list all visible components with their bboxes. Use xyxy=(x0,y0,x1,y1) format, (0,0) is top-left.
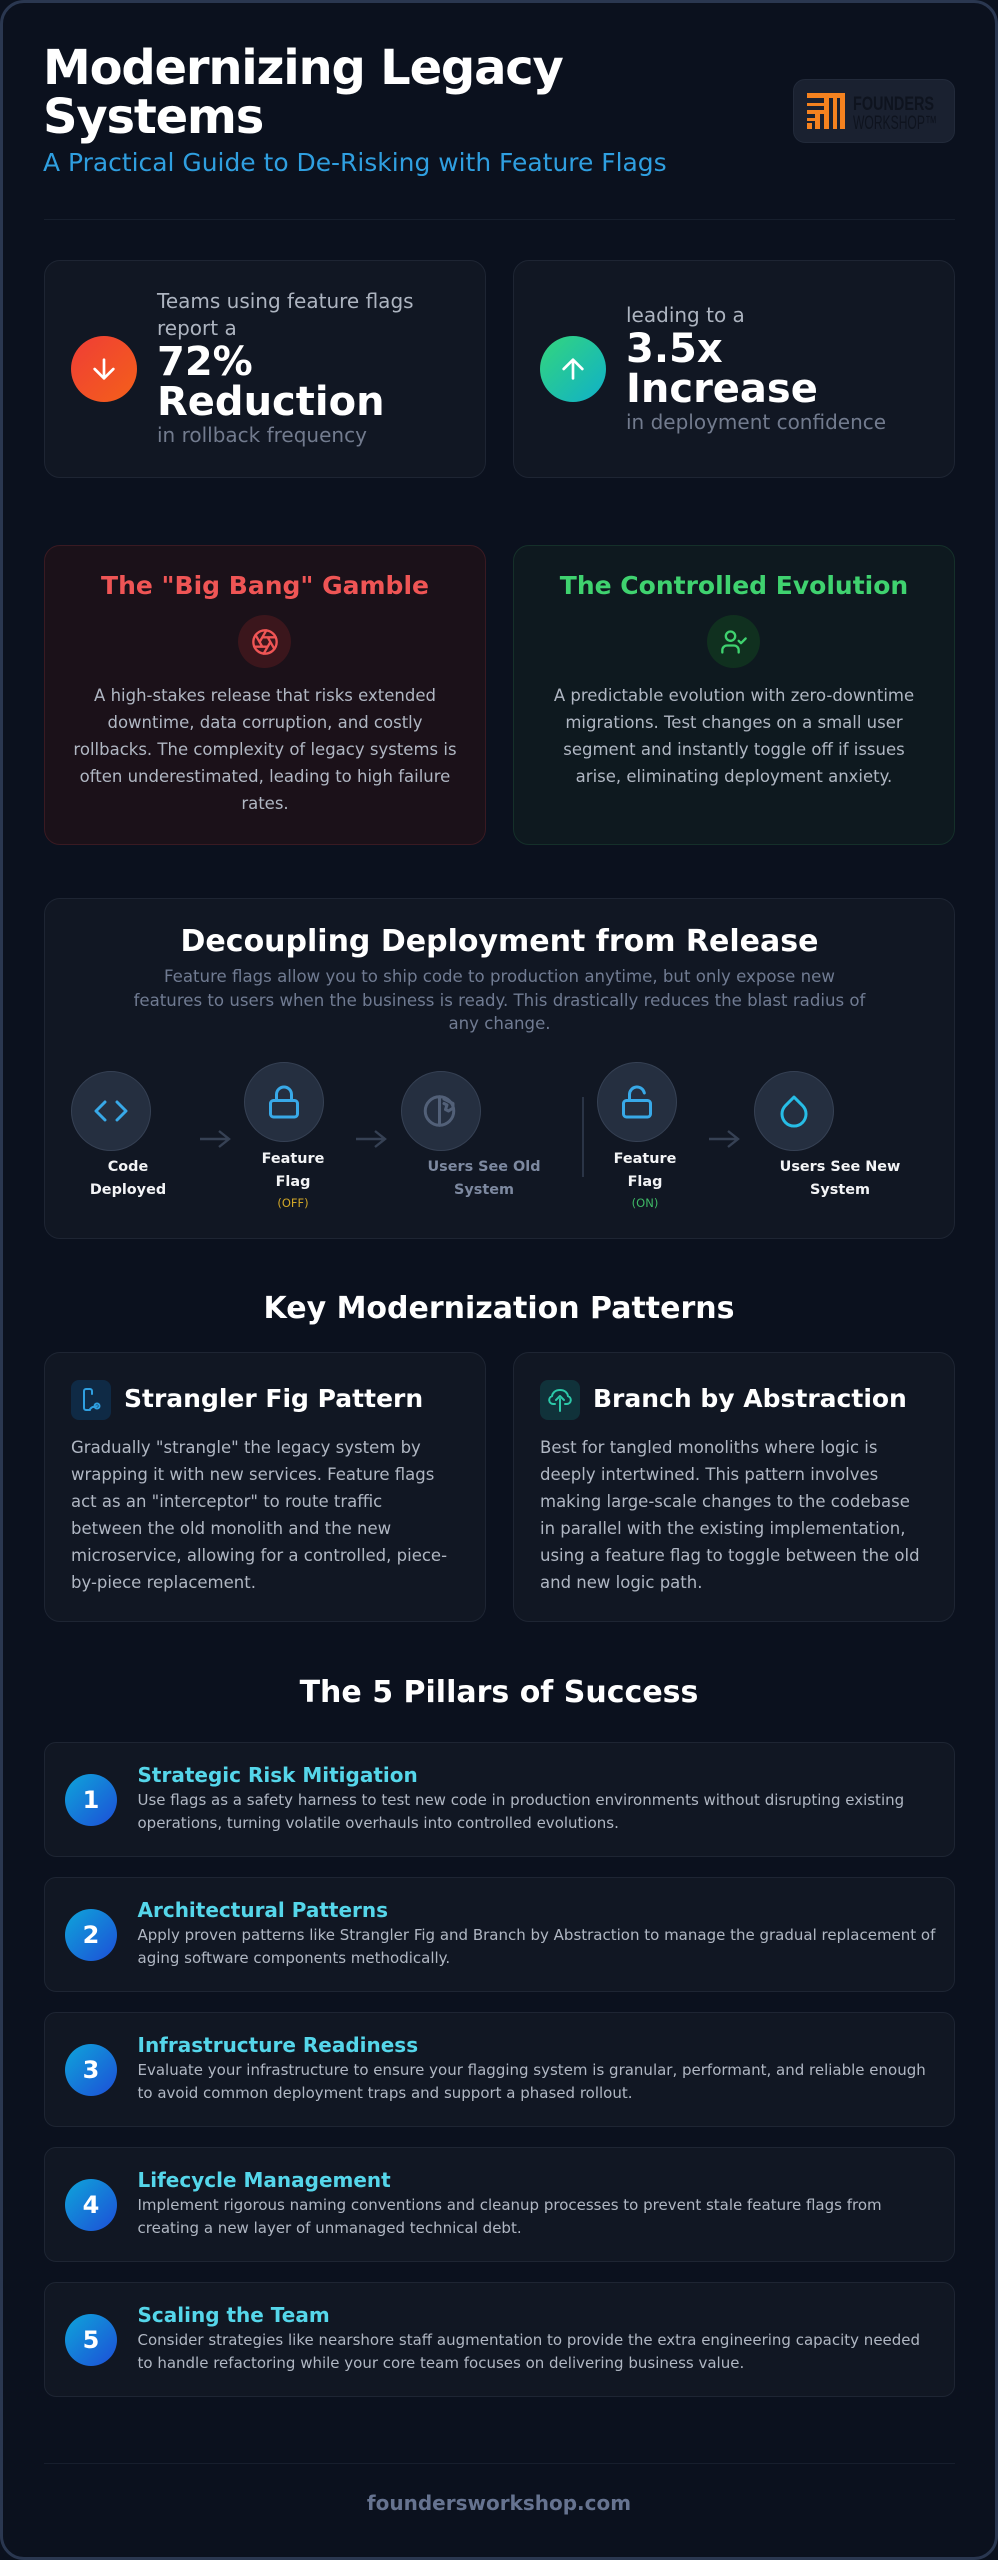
pillar title: Strategic Risk Mitigation xyxy=(138,1763,418,1787)
icon: user check xyxy=(707,615,760,668)
body text: by-piece replacement. xyxy=(71,1573,256,1592)
label: users see new xyxy=(780,1159,900,1198)
title: Modernizing Legacy xyxy=(43,40,563,96)
stat text: 3.5x xyxy=(626,326,723,372)
stat text: report a xyxy=(157,316,237,340)
label: code deployed xyxy=(90,1159,166,1198)
panel: stat confidence xyxy=(513,260,955,478)
heading: five pillars: The 5 Pillars of Success xyxy=(300,1675,698,1710)
body text: A predictable evolution with zero-downtime xyxy=(554,686,914,705)
stat text: leading to a xyxy=(626,302,745,326)
footer: foundersworkshop.com xyxy=(367,2491,631,2515)
title: Systems xyxy=(43,89,263,145)
stat text: in rollback frequency xyxy=(157,423,367,447)
pillar text: to avoid common deployment traps and support a phased rollout. xyxy=(138,2084,633,2102)
arrow xyxy=(356,1130,387,1148)
pillar text xyxy=(138,2331,920,2372)
pillar text: creating a new layer of unmanaged technical debt. xyxy=(138,2219,522,2237)
number xyxy=(65,1909,117,1961)
pillar 3 xyxy=(44,2012,955,2127)
heading: The Controlled Evolution xyxy=(560,571,908,600)
panel: big bang xyxy=(44,545,486,845)
number: 5 xyxy=(83,2326,99,2354)
step: flag on xyxy=(597,1062,677,1142)
heading: key patterns: Key Modernization Patterns xyxy=(264,1291,734,1326)
label: users see old xyxy=(427,1159,541,1198)
label: users see new: System xyxy=(810,1182,870,1198)
logo xyxy=(793,79,955,143)
heading: The "Big Bang" Gamble xyxy=(101,571,429,600)
body text: rates. xyxy=(241,794,289,813)
stat text: Teams using feature flags xyxy=(157,289,414,313)
description xyxy=(134,967,866,1033)
body text xyxy=(554,686,914,786)
number xyxy=(65,2179,117,2231)
body text: A high-stakes release that risks extended xyxy=(94,686,436,705)
pillar title: Architectural Patterns xyxy=(138,1898,388,1922)
body text: microservice, allowing for a controlled, piece- xyxy=(71,1546,447,1565)
body text: rollbacks. The complexity of legacy systems is xyxy=(73,740,457,759)
header divider xyxy=(44,219,955,220)
label: users see old: System xyxy=(454,1182,514,1198)
stat text: Increase xyxy=(626,366,818,412)
icon: branch xyxy=(540,1380,580,1420)
label: flag on: (ON) xyxy=(632,1196,658,1210)
icon: arrow up xyxy=(540,336,606,402)
body text: in parallel with the existing implementation, xyxy=(540,1519,906,1538)
number xyxy=(65,1774,117,1826)
description: any change. xyxy=(448,1014,551,1033)
body text xyxy=(540,1438,920,1592)
label: flag off: Feature xyxy=(262,1151,324,1167)
body text: migrations. Test changes on a small user xyxy=(565,713,903,732)
description: features to users when the business is ready. This drastically reduces the blast radius of xyxy=(134,991,865,1010)
body text: downtime, data corruption, and costly xyxy=(107,713,423,732)
body text: making large-scale changes to the codebase xyxy=(540,1492,910,1511)
pillar text xyxy=(138,1926,936,1967)
body text: Gradually "strangle" the legacy system by xyxy=(71,1438,421,1457)
label: flag off: Flag xyxy=(276,1174,310,1190)
body text: deeply intertwined. This pattern involves xyxy=(540,1465,878,1484)
pillar 1 xyxy=(44,1742,955,1857)
description: Feature flags allow you to ship code to production anytime, but only expose new xyxy=(164,967,835,986)
icon: strangler xyxy=(71,1380,111,1420)
number xyxy=(65,2044,117,2096)
stat text xyxy=(156,289,414,447)
number: 4 xyxy=(83,2191,99,2219)
arrow xyxy=(709,1130,740,1148)
step: users see new xyxy=(754,1071,834,1151)
body text: often underestimated, leading to high failure xyxy=(80,767,450,786)
panel: branch by abstraction xyxy=(513,1352,955,1622)
label: flag on xyxy=(614,1151,676,1210)
pillar text: Use flags as a safety harness to test new code in production environments without disrupting existing xyxy=(138,1791,904,1809)
body text: using a feature flag to toggle between the old xyxy=(540,1546,920,1565)
number: 3 xyxy=(83,2056,99,2084)
pillar text xyxy=(138,2061,926,2102)
pillar 4 xyxy=(44,2147,955,2262)
label: code deployed: Deployed xyxy=(90,1182,166,1198)
panel: controlled evolution xyxy=(513,545,955,845)
pillar text: operations, turning volatile overhauls into controlled evolutions. xyxy=(138,1814,619,1832)
pillar 2 xyxy=(44,1877,955,1992)
number: 1 xyxy=(83,1786,99,1814)
step: users see old xyxy=(401,1071,481,1151)
pillar text: aging software components methodically. xyxy=(138,1949,450,1967)
body text xyxy=(73,686,457,813)
stat text xyxy=(626,302,886,434)
label: flag on: Flag xyxy=(628,1174,662,1190)
label: flag on: Feature xyxy=(614,1151,676,1167)
pillar text: to handle refactoring while your core team focuses on delivering business value. xyxy=(138,2354,744,2372)
pillar text: Consider strategies like nearshore staff augmentation to provide the extra engineering capacity needed xyxy=(138,2331,920,2349)
stat text: 72% xyxy=(157,339,253,385)
icon: aperture xyxy=(238,615,291,668)
icon: arrow down xyxy=(71,336,137,402)
stat text: in deployment confidence xyxy=(626,410,886,434)
pillar text xyxy=(138,1791,904,1832)
body text: and new logic path. xyxy=(540,1573,702,1592)
footer divider xyxy=(44,2463,955,2464)
pillar title: Infrastructure Readiness xyxy=(138,2033,418,2057)
panel: decoupling deployment xyxy=(44,898,955,1239)
title: Branch by Abstraction xyxy=(593,1384,907,1413)
arrow xyxy=(200,1130,231,1148)
body text: act as an "interceptor" to route traffic xyxy=(71,1492,382,1511)
divider between states xyxy=(582,1097,584,1177)
pillar text: Evaluate your infrastructure to ensure your flagging system is granular, performant, and reliable enough xyxy=(138,2061,926,2079)
body text: segment and instantly toggle off if issues xyxy=(563,740,905,759)
number: 2 xyxy=(83,1921,99,1949)
title xyxy=(43,40,563,145)
pillar title: Scaling the Team xyxy=(138,2303,330,2327)
stat text: Reduction xyxy=(157,379,385,425)
title: Strangler Fig Pattern xyxy=(124,1384,423,1413)
label: flag off: (OFF) xyxy=(277,1196,309,1210)
label: code deployed: Code xyxy=(108,1159,148,1175)
step: flag off xyxy=(244,1062,324,1142)
pillar title: Lifecycle Management xyxy=(138,2168,391,2192)
body text: arise, eliminating deployment anxiety. xyxy=(576,767,892,786)
body text: between the old monolith and the new xyxy=(71,1519,391,1538)
body text xyxy=(71,1438,447,1592)
label: flag off xyxy=(262,1151,324,1210)
step: code deployed xyxy=(71,1071,151,1151)
body text: Best for tangled monoliths where logic is xyxy=(540,1438,878,1457)
pillar text xyxy=(138,2196,882,2237)
label: users see new: Users See New xyxy=(780,1159,900,1175)
body text: wrapping it with new services. Feature flags xyxy=(71,1465,434,1484)
heading: Decoupling Deployment from Release xyxy=(181,924,818,959)
label: users see old: Users See Old xyxy=(427,1159,541,1175)
subtitle: A Practical Guide to De-Risking with Feature Flags xyxy=(43,148,667,177)
pillar text: Implement rigorous naming conventions and cleanup processes to prevent stale feature flags from xyxy=(138,2196,882,2214)
panel: stat rollback xyxy=(44,260,486,478)
number xyxy=(65,2314,117,2366)
pillar text: Apply proven patterns like Strangler Fig and Branch by Abstraction to manage the gradual replacement of xyxy=(138,1926,935,1944)
panel: strangler fig xyxy=(44,1352,486,1622)
pillar 5 xyxy=(44,2282,955,2397)
